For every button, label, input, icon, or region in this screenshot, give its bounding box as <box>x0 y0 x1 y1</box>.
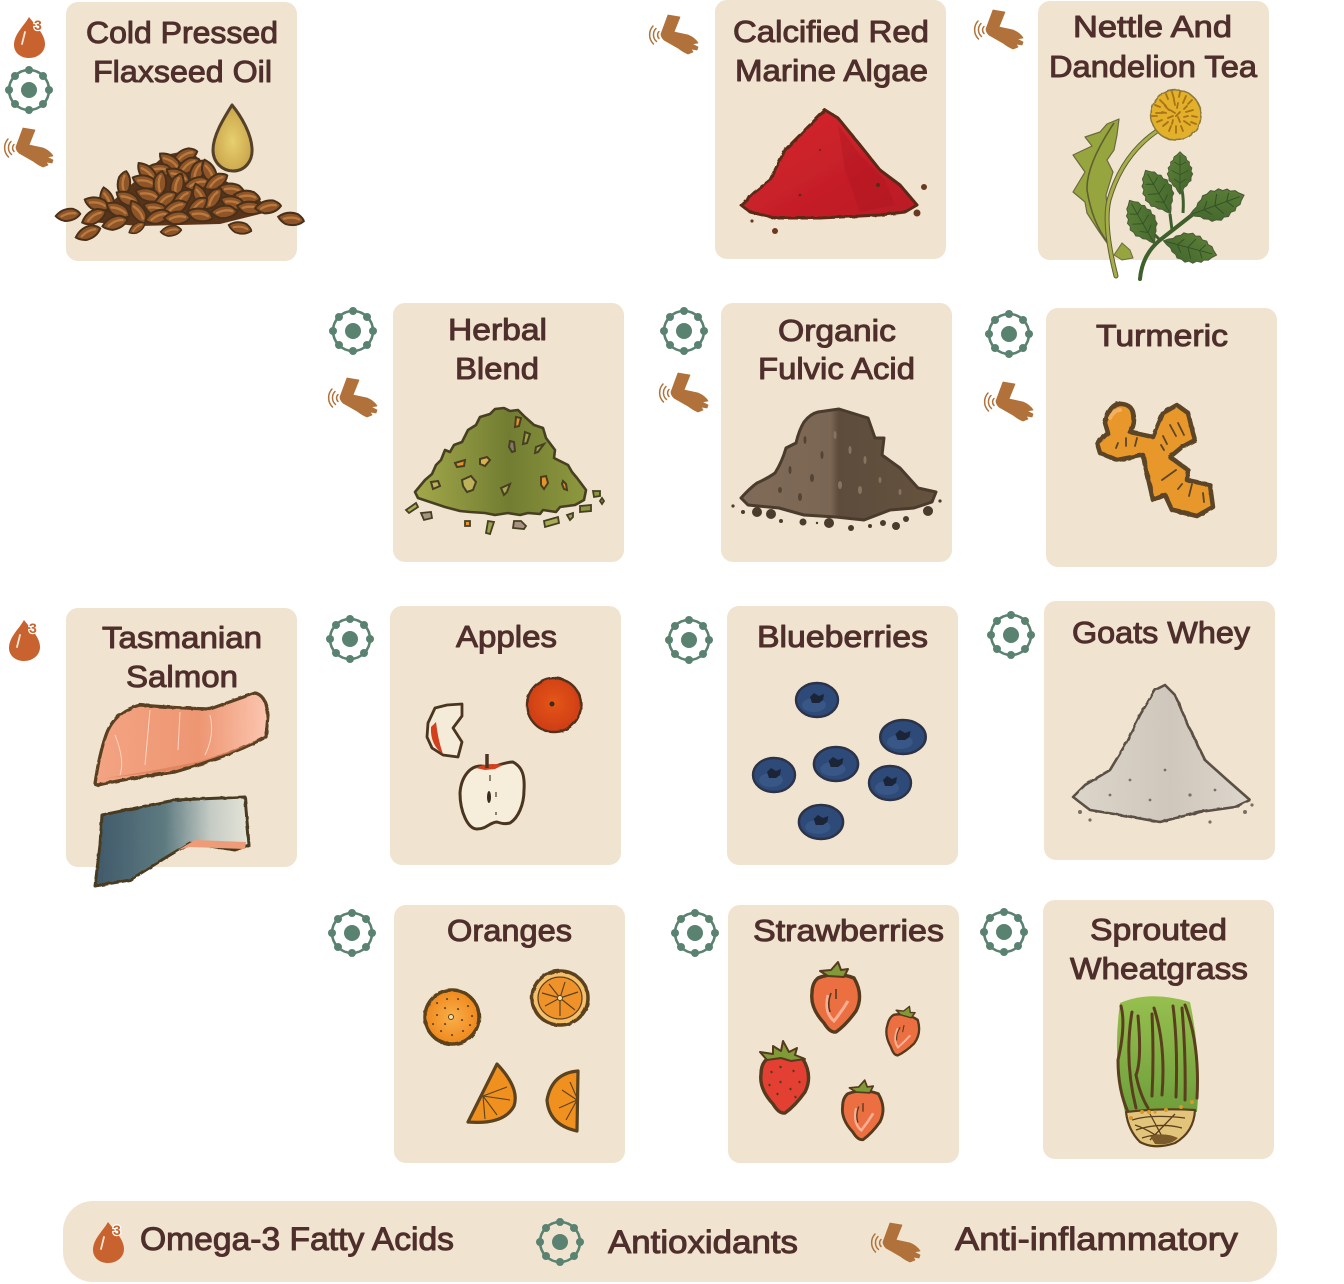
illustration: whey powder pile <box>1073 685 1254 824</box>
card background <box>1038 1 1269 260</box>
illustration: fulvic powder pile <box>731 409 942 531</box>
icon: antioxidant <box>326 615 374 663</box>
card background <box>1043 900 1274 1159</box>
illustration: dandelion and nettle <box>1073 90 1249 279</box>
panel: Calcified Red Marine Algae <box>650 0 946 259</box>
icon: antioxidant <box>985 310 1033 358</box>
heading <box>86 15 278 89</box>
panel: Blueberries <box>665 606 958 865</box>
panel: Strawberries <box>671 905 959 1163</box>
card background <box>727 606 958 865</box>
legend item: omega-3: Omega-3 Fatty Acids <box>140 1221 454 1257</box>
legend item: anti-inflammatory: Anti-inflammatory <box>955 1221 1238 1257</box>
heading: Marine Algae <box>735 53 928 88</box>
icon: omega-3 <box>9 620 40 661</box>
heading: Dandelion Tea <box>1049 49 1258 84</box>
illustration: turmeric root <box>1097 404 1213 516</box>
icon: omega-3 <box>14 17 45 58</box>
icon: anti-inflammatory <box>660 373 708 412</box>
icon: antioxidant <box>671 909 719 957</box>
heading: Turmeric <box>1096 318 1228 353</box>
heading: Tasmanian <box>102 620 262 655</box>
heading: Strawberries <box>753 913 944 948</box>
card background <box>66 2 297 261</box>
panel: Herbal Blend <box>329 303 624 562</box>
icon: antioxidant <box>987 611 1035 659</box>
heading: Fulvic Acid <box>758 351 915 386</box>
illustration: wheatgrass <box>1117 996 1198 1146</box>
panel: Nettle And Dandelion Tea <box>975 1 1269 279</box>
icon: antioxidant <box>329 307 377 355</box>
heading: Herbal <box>448 312 547 347</box>
icon: antioxidant <box>328 909 376 957</box>
illustration: oil drop <box>213 105 252 171</box>
illustration: strawberries <box>760 962 924 1140</box>
illustration: flaxseed pile <box>55 146 305 243</box>
heading <box>1070 912 1248 986</box>
card background <box>393 303 624 562</box>
icon: antioxidant <box>980 908 1028 956</box>
panel: Oranges <box>328 905 625 1163</box>
heading: Salmon <box>126 659 238 694</box>
icon: anti-inflammatory <box>329 378 377 417</box>
heading <box>733 14 929 88</box>
icon: antioxidant <box>665 616 713 664</box>
panel: Goats Whey <box>987 601 1275 860</box>
illustration: blueberries <box>753 683 926 839</box>
icon: anti-inflammatory <box>650 15 698 54</box>
icon: anti-inflammatory <box>985 382 1033 421</box>
heading: Calcified Red <box>733 14 929 49</box>
panel: Cold Pressed Flaxseed Oil <box>5 2 305 261</box>
panel: legend <box>63 1201 1277 1282</box>
panel: Sprouted Wheatgrass <box>980 900 1274 1159</box>
card background <box>66 608 297 867</box>
illustration: salmon flesh fillet <box>95 693 268 785</box>
heading: Nettle And <box>1073 9 1232 44</box>
heading: Flaxseed Oil <box>93 54 272 89</box>
illustration: orange pieces <box>425 971 588 1131</box>
icon: anti-inflammatory <box>975 10 1023 49</box>
card background <box>715 0 946 259</box>
legend background <box>63 1201 1277 1282</box>
heading: Sprouted <box>1090 912 1227 947</box>
illustration: apple pieces <box>427 678 581 829</box>
panel: Turmeric <box>985 308 1277 567</box>
legend item: antioxidants <box>536 1218 798 1266</box>
heading <box>448 312 547 386</box>
card background <box>721 303 952 562</box>
card background <box>1044 601 1275 860</box>
heading: Organic <box>778 313 896 348</box>
heading: Goats Whey <box>1072 615 1251 650</box>
heading <box>1049 9 1258 84</box>
panel: Organic Fulvic Acid <box>660 303 952 562</box>
panel: Tasmanian Salmon <box>9 608 297 886</box>
card background <box>728 905 959 1163</box>
icon: anti-inflammatory <box>5 128 53 167</box>
heading <box>758 313 915 386</box>
panel: Apples <box>326 606 621 865</box>
heading: Apples <box>456 619 557 654</box>
heading: Blend <box>455 351 539 386</box>
icon: antioxidant <box>5 66 53 114</box>
heading: Wheatgrass <box>1070 951 1248 986</box>
illustration: red algae powder <box>741 110 927 234</box>
heading: Blueberries <box>757 619 928 654</box>
card background <box>394 905 625 1163</box>
illustration: salmon skin fillet <box>95 797 249 886</box>
card background <box>1046 308 1277 567</box>
illustration: herb pile <box>406 408 604 534</box>
card background <box>390 606 621 865</box>
legend item: antioxidants: Antioxidants <box>608 1224 798 1260</box>
heading: Oranges <box>447 913 572 948</box>
icon: antioxidant <box>660 307 708 355</box>
heading <box>102 620 262 694</box>
legend item: anti-inflammatory <box>872 1221 1238 1262</box>
heading: Cold Pressed <box>86 15 278 50</box>
